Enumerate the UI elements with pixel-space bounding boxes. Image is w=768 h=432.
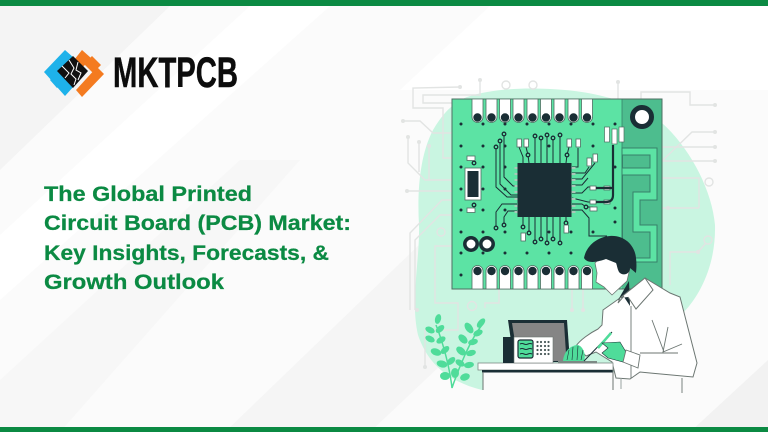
antenna feed trace: [596, 145, 613, 202]
logo: [44, 49, 238, 97]
technician: [576, 236, 697, 393]
antenna panel: [622, 99, 662, 288]
title: Growth Outlook: [44, 271, 224, 294]
top green bar: [0, 0, 768, 6]
device green display: [518, 340, 533, 358]
bottom pad holes: [473, 267, 591, 275]
board body: [452, 99, 662, 289]
left gloved hand holding board: [563, 345, 585, 361]
dark resistor: [465, 168, 481, 200]
collar: [618, 278, 653, 309]
small white components: [467, 139, 610, 241]
face: [595, 255, 630, 295]
white area below table: [483, 372, 688, 396]
logo wordmark: MKTPCB: [113, 49, 238, 97]
title: Key Insights, Forecasts, &: [44, 242, 329, 265]
title: [44, 183, 351, 294]
logo icon: [44, 50, 104, 97]
shirt cuff: [623, 350, 640, 368]
chip traces: [496, 134, 607, 243]
hair: [584, 236, 636, 274]
top pads: [472, 99, 592, 122]
mounting hole: [632, 108, 652, 126]
title: Circuit Board (PCB) Market:: [44, 212, 351, 235]
shirt detail lines: [631, 306, 682, 393]
technician hands and tool: [563, 332, 640, 368]
shirt body: [576, 278, 697, 379]
neck shadow: [618, 281, 630, 306]
bottom green bar: [0, 427, 768, 432]
twin ring connectors: [465, 238, 493, 250]
device panel: [514, 337, 553, 363]
board via dots: [460, 122, 616, 276]
right gloved hand: [602, 342, 626, 362]
device back: [503, 337, 515, 363]
device keypad: [536, 341, 550, 355]
workbench table: [478, 363, 621, 390]
title: The Global Printed: [44, 183, 252, 206]
main chip: [514, 163, 576, 217]
background circuit traces: [403, 80, 715, 367]
base plate: [558, 361, 597, 364]
trace end dots: [401, 78, 717, 369]
white bars near antenna: [604, 127, 624, 144]
trace end rings: [472, 132, 588, 245]
plant: [424, 313, 487, 388]
laptop and test device: [503, 320, 597, 364]
illustration: mint background blob: [415, 88, 715, 392]
circuit board: [452, 99, 662, 289]
laptop screen: [508, 320, 570, 362]
tool: [584, 332, 612, 361]
bottom pads: [472, 266, 592, 289]
top pad holes: [473, 113, 591, 122]
